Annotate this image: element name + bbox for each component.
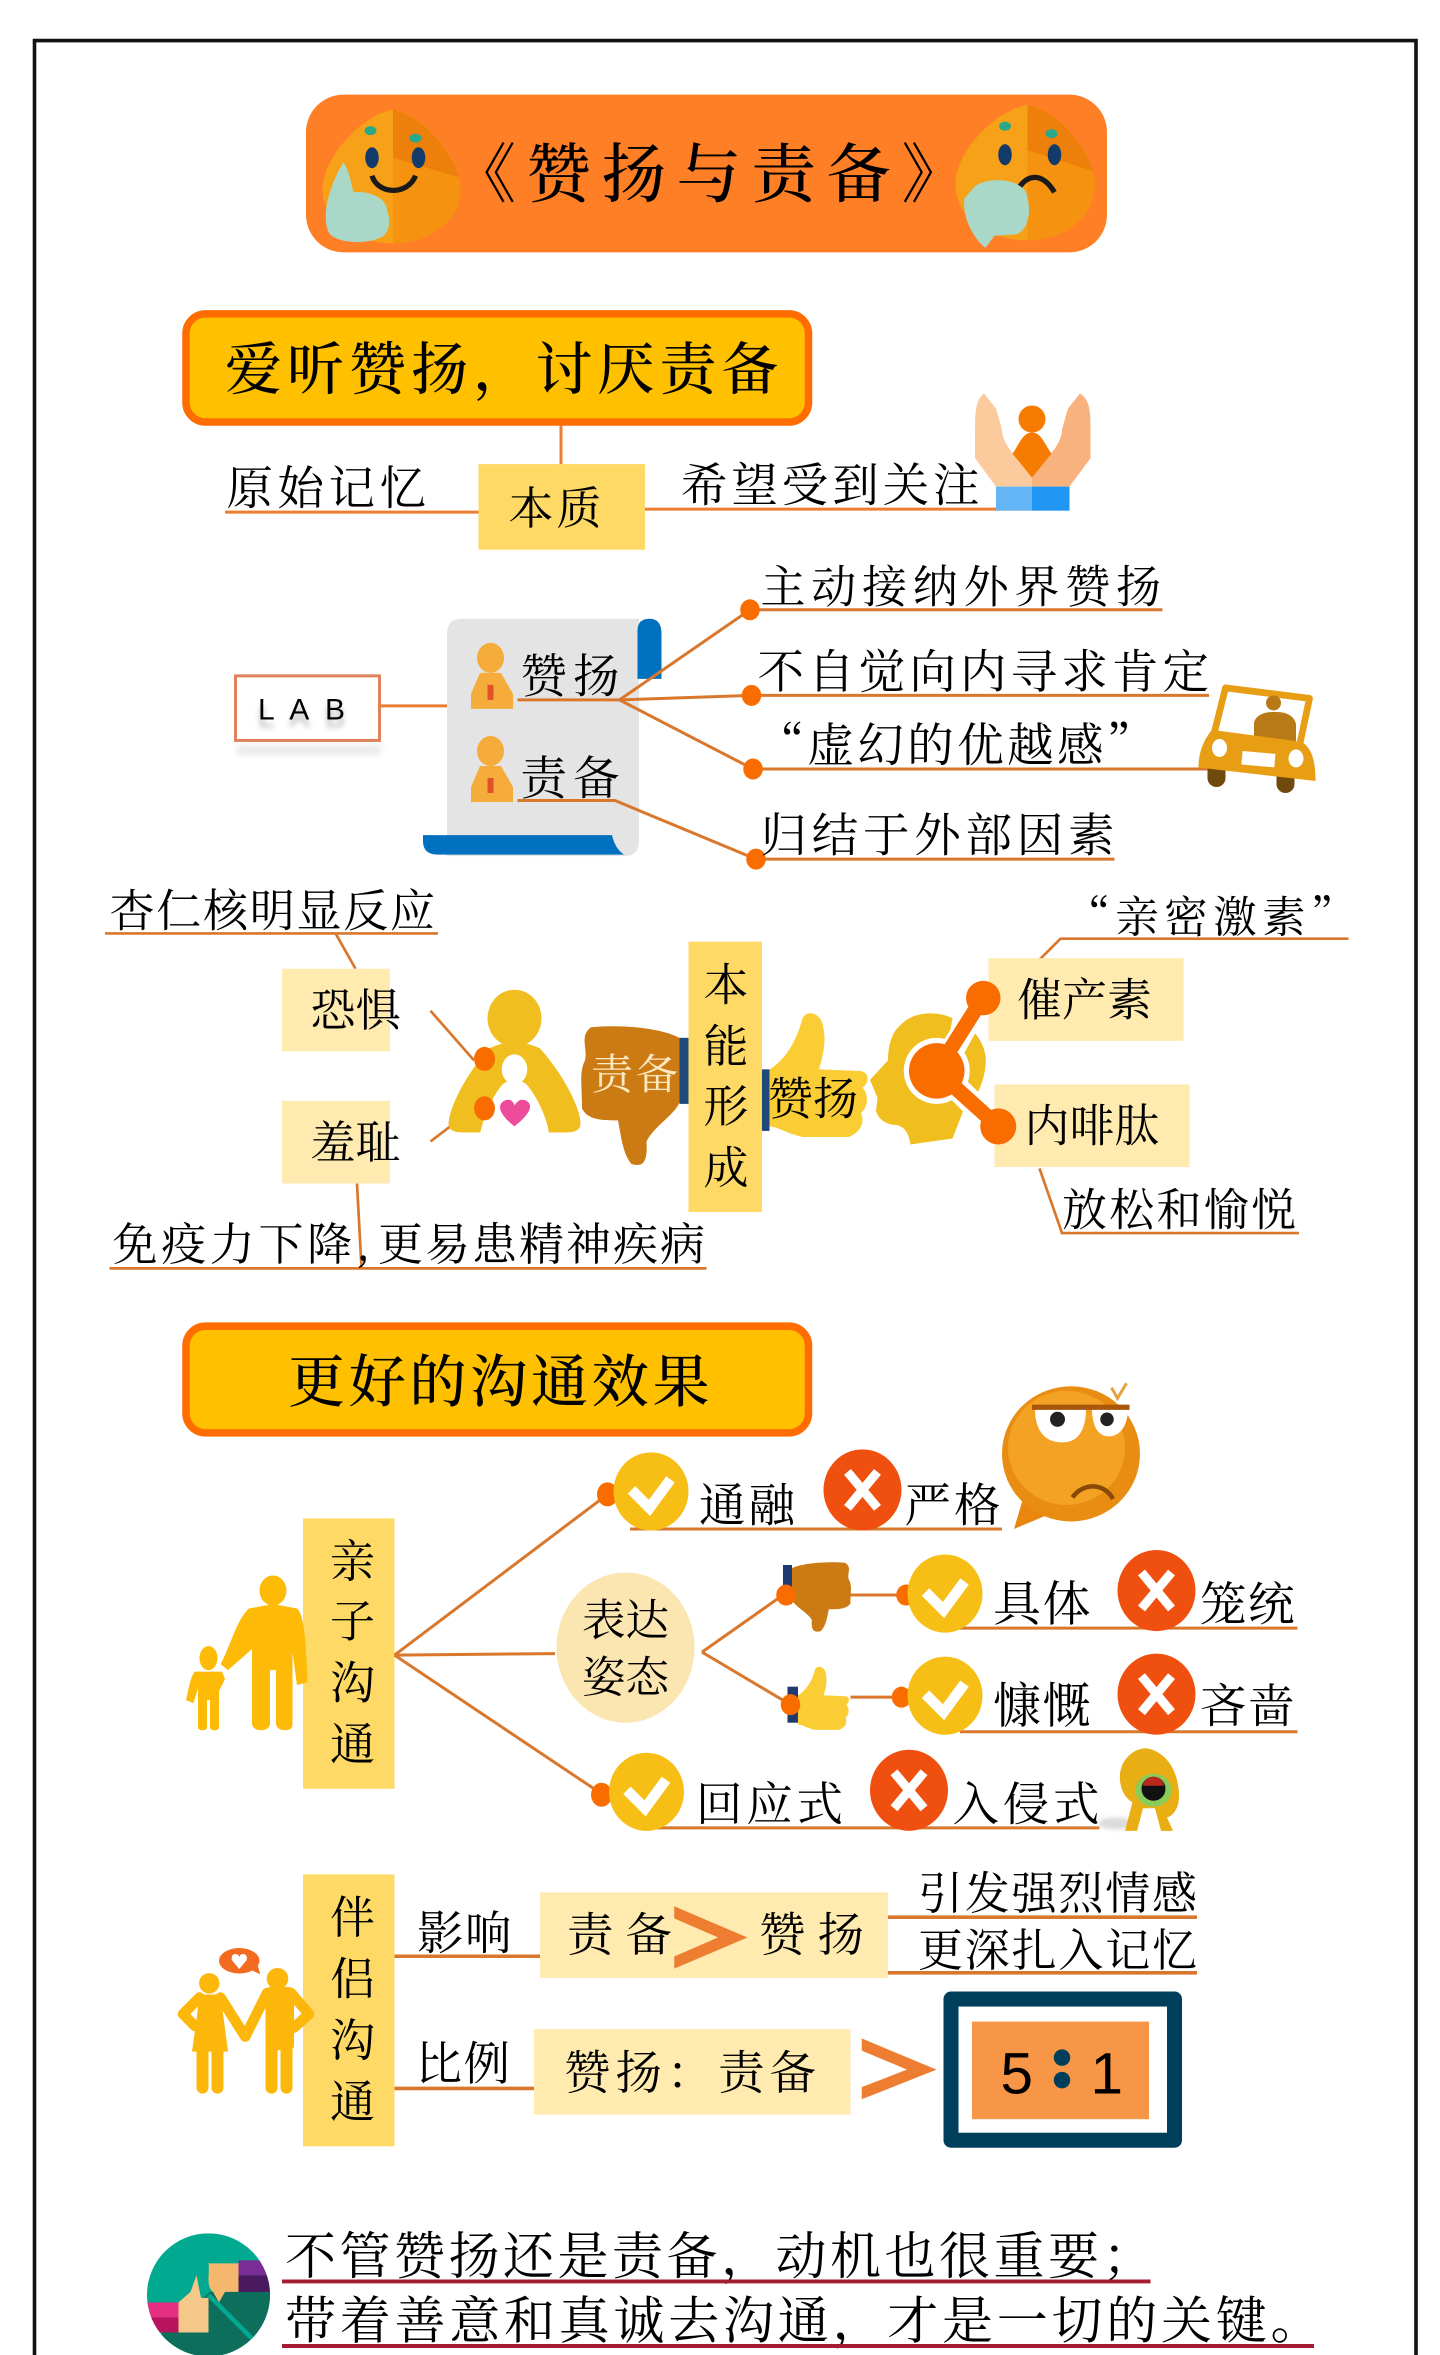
box: 催产素: 催产素 <box>1017 963 1152 1028</box>
icon: parent and child <box>448 990 580 1134</box>
icon: thumb down with label: 责备 <box>591 1042 678 1102</box>
text: 笼统: 笼统 <box>1200 1568 1295 1635</box>
icon: 5:1 tablet: 1 <box>1090 2042 1123 2107</box>
icon: thumb up with label <box>762 1013 868 1137</box>
text: 赞扬: 赞扬 <box>520 639 620 706</box>
icon: check and cross, 回应式 row <box>591 1750 948 1831</box>
connectors <box>394 1917 1197 2088</box>
box: 本能形成: 能 <box>704 1010 748 1075</box>
heading: 更好的沟通效果 <box>186 1326 808 1433</box>
bubble: 表达姿态 <box>556 1573 694 1723</box>
icon: smiling face with thumb up <box>322 110 460 243</box>
panel: 伴侣沟通 <box>183 1857 1197 2148</box>
box: 本能形成: 成 <box>704 1131 748 1197</box>
icon: 5:1 tablet: 5 <box>1000 2042 1033 2107</box>
box: 伴侣沟通: 伴 <box>330 1881 375 1946</box>
box: 本质: 本质 <box>508 472 602 537</box>
text: conclusion line 1: 不管赞扬还是责备，动机也很重要； <box>285 2215 1153 2289</box>
icon: chevron <box>862 2040 934 2098</box>
box: 亲子沟通 <box>303 1518 394 1789</box>
icon: one-eyed figure <box>1098 1748 1179 1831</box>
box: 羞耻: 羞耻 <box>310 1106 400 1171</box>
box: 伴侣沟通: 侣 <box>330 1943 375 2008</box>
icon: car <box>1198 688 1316 793</box>
box: 本质 <box>478 464 645 550</box>
icon: caring hands <box>975 394 1090 511</box>
text: 免疫力下降,更易患精神疾病: 免疫力下降, <box>112 1208 370 1273</box>
icon: 5:1 tablet <box>944 1992 1182 2148</box>
box: 内啡肽: 内啡肽 <box>1024 1089 1160 1154</box>
box: 催产素 <box>988 958 1184 1041</box>
icon: person 1 <box>471 643 513 709</box>
text: 不自觉向内寻求肯定: 不自觉向内寻求肯定 <box>758 635 1209 702</box>
text: 引发强烈情感: 引发强烈情感 <box>918 1857 1197 1922</box>
box: 本能形成: 本 <box>704 948 748 1013</box>
box: 赞扬:责备: 赞扬：责备 <box>564 2036 816 2103</box>
text: 希望受到关注: 希望受到关注 <box>681 449 980 516</box>
text: 放松和愉悦: 放松和愉悦 <box>1062 1174 1296 1239</box>
panel: 本能形成 <box>105 875 1354 1273</box>
text: 吝啬: 吝啬 <box>1200 1670 1294 1737</box>
title banner <box>306 95 1107 252</box>
bubble: 表达姿态: 姿态 <box>582 1644 670 1706</box>
box: 伴侣沟通: 沟 <box>330 2004 375 2069</box>
box: 责备 > 赞扬: 责备 <box>567 1898 672 1965</box>
bubble: 表达姿态: 表达 <box>582 1587 669 1649</box>
text: 比例: 比例 <box>416 2027 510 2094</box>
icon: document scroll <box>423 619 662 856</box>
box: 赞扬:责备 <box>534 2029 850 2115</box>
box: 本能形成 <box>688 942 762 1212</box>
icon: sad face with thumb down <box>956 105 1095 248</box>
panel: 本质 <box>225 394 1090 550</box>
panel: 亲子沟通 <box>186 1383 1298 1834</box>
heading: 爱听赞扬,讨厌责备 <box>186 314 808 422</box>
connectors <box>394 1494 1298 1828</box>
box: 本能形成: 形 <box>704 1070 748 1135</box>
icon: thumb up with label: 赞扬 <box>768 1062 858 1127</box>
title text: 《赞扬与责备》 <box>452 124 966 216</box>
text: 责备: 责备 <box>520 741 620 809</box>
box: 亲子沟通: 亲 <box>330 1525 375 1590</box>
text: 慷慨: 慷慨 <box>993 1668 1090 1737</box>
text: 原始记忆: 原始记忆 <box>226 452 426 519</box>
icon: head with network <box>870 981 1016 1144</box>
text: 具体: 具体 <box>993 1566 1090 1635</box>
panel: conclusion <box>147 2230 1314 2355</box>
icon: row 1 check <box>597 1452 688 1530</box>
box: 亲子沟通: 沟 <box>330 1647 375 1712</box>
connector dots <box>740 599 766 870</box>
text: conclusion line 2: 带着善意和真诚去沟通，才是一切的关键。 <box>285 2279 1321 2353</box>
text: 免疫力下降,更易患精神疾病: 更易患精神疾病 <box>378 1208 705 1273</box>
box: 内啡肽 <box>994 1084 1190 1167</box>
icon: thumbs in circle <box>147 2233 270 2355</box>
box: 责备 > 赞扬 <box>540 1892 888 1978</box>
heading: 更好的沟通效果: 更好的沟通效果 <box>288 1336 710 1418</box>
box: 恐惧 <box>282 969 400 1051</box>
box: LAB: L A B <box>258 693 345 726</box>
text: 亲密激素: “亲密激素” <box>1066 884 1354 946</box>
text: 严格: 严格 <box>904 1468 1000 1535</box>
text: 杏仁核明显反应: 杏仁核明显反应 <box>110 875 435 940</box>
box: 亲子沟通: 子 <box>330 1585 375 1650</box>
box: 亲子沟通: 通 <box>330 1708 375 1773</box>
icon: check and cross, 具体 row <box>896 1550 1196 1633</box>
icon: small thumb down <box>776 1562 851 1632</box>
box: 责备 > 赞扬: 赞扬 <box>759 1898 864 1965</box>
icon: check and cross, 慷慨 row <box>892 1654 1196 1735</box>
text: 入侵式: 入侵式 <box>952 1767 1100 1834</box>
icon: person 2 <box>471 736 513 802</box>
text: 回应式: 回应式 <box>696 1767 843 1834</box>
icon: small thumb up <box>781 1667 849 1730</box>
text: 免疫力下降,更易患精神疾病 <box>112 1208 705 1273</box>
icon: angry face bubble <box>1002 1383 1140 1529</box>
icon: row 1 cross <box>824 1449 902 1530</box>
connectors <box>518 610 1209 859</box>
icon: thumb down with label <box>581 1026 688 1165</box>
text: 主动接纳外界赞扬: 主动接纳外界赞扬 <box>760 550 1161 615</box>
box: 恐惧: 恐惧 <box>310 974 400 1039</box>
box: 羞耻 <box>282 1101 400 1184</box>
box: 伴侣沟通: 通 <box>330 2066 375 2131</box>
text: 更深扎入记忆: 更深扎入记忆 <box>918 1914 1197 1979</box>
heading: 爱听赞扬,讨厌责备: 爱听赞扬，讨厌责备 <box>225 324 778 406</box>
text: 影响: 影响 <box>417 1896 512 1963</box>
icon: couple with heart <box>183 1948 309 2094</box>
box: 伴侣沟通 <box>303 1874 394 2146</box>
box: LAB <box>236 676 381 755</box>
text: 归结于外部因素: 归结于外部因素 <box>760 799 1114 866</box>
icon: parent and child silhouette <box>186 1576 308 1730</box>
panel: LAB 分类 <box>236 550 1316 870</box>
text: 虚幻的优越感: “虚幻的优越感” <box>758 708 1153 775</box>
text: 通融: 通融 <box>699 1468 796 1535</box>
